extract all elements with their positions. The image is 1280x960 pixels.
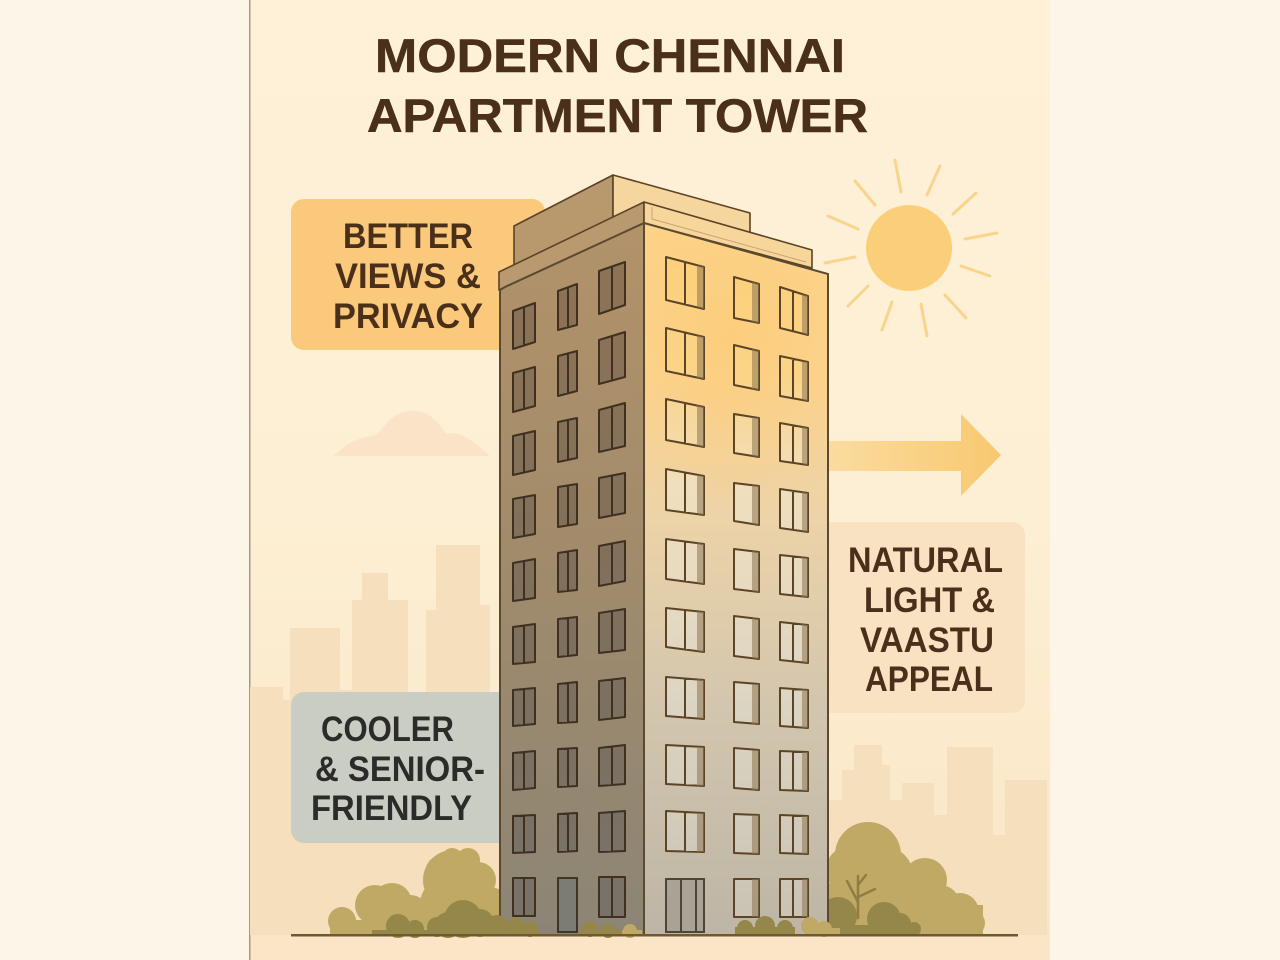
callout box: natural light and vaastu appeal <box>800 522 1025 713</box>
window shading strips <box>697 265 808 917</box>
ground-floor door on left face <box>558 878 577 932</box>
ground-floor glass door on right face <box>666 879 704 932</box>
label: better views and privacy <box>333 217 483 336</box>
label: better views and privacy: PRIVACY <box>333 297 483 336</box>
label: natural light and vaastu appeal: NATURAL <box>848 541 1003 580</box>
left face windows <box>513 262 625 917</box>
right face windows <box>666 257 808 917</box>
label: better views and privacy: VIEWS & <box>335 257 481 296</box>
right tower face <box>644 223 828 935</box>
label: natural light and vaastu appeal: VAASTU <box>860 621 994 660</box>
label: better views and privacy: BETTER <box>343 217 473 256</box>
label: natural light and vaastu appeal: APPEAL <box>865 660 993 699</box>
callout box: cooler and senior-friendly <box>291 692 531 843</box>
roof block <box>514 175 750 276</box>
bushes behind the tower: left <box>328 848 508 935</box>
label: cooler and senior-friendly: COOLER <box>321 710 454 749</box>
label: cooler and senior-friendly <box>311 710 485 828</box>
background: city skyline <box>250 545 1047 935</box>
title: APARTMENT TOWER <box>367 89 868 142</box>
bushes behind the tower: right with sapling <box>819 822 985 936</box>
title: MODERN CHENNAI <box>375 29 845 82</box>
background: cloud <box>333 411 490 456</box>
foreground shrubs at tower base <box>372 900 840 938</box>
left tower face <box>500 223 644 935</box>
title <box>367 29 868 142</box>
label: cooler and senior-friendly: & SENIOR- <box>315 750 485 789</box>
label: natural light and vaastu appeal: LIGHT & <box>864 581 995 620</box>
arrow pointing east <box>828 414 1001 496</box>
callout box: better views and privacy <box>291 199 545 350</box>
label: cooler and senior-friendly: FRIENDLY <box>311 789 472 828</box>
ground line <box>291 934 1018 936</box>
label: natural light and vaastu appeal <box>848 541 1003 699</box>
sun icon <box>825 160 997 336</box>
parapet <box>499 202 812 290</box>
apartment tower <box>499 175 828 935</box>
